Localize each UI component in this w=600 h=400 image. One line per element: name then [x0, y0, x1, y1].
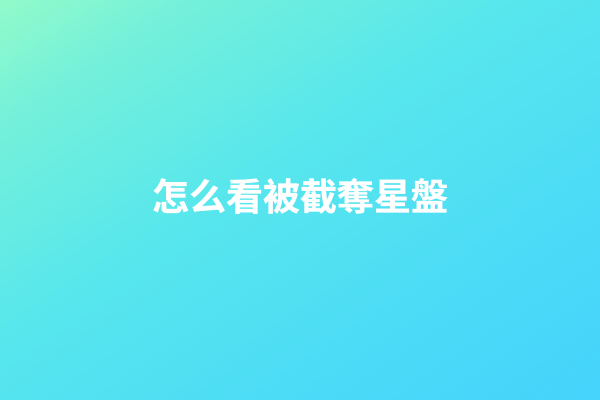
title: 怎么看被截奪星盤: [152, 177, 448, 218]
